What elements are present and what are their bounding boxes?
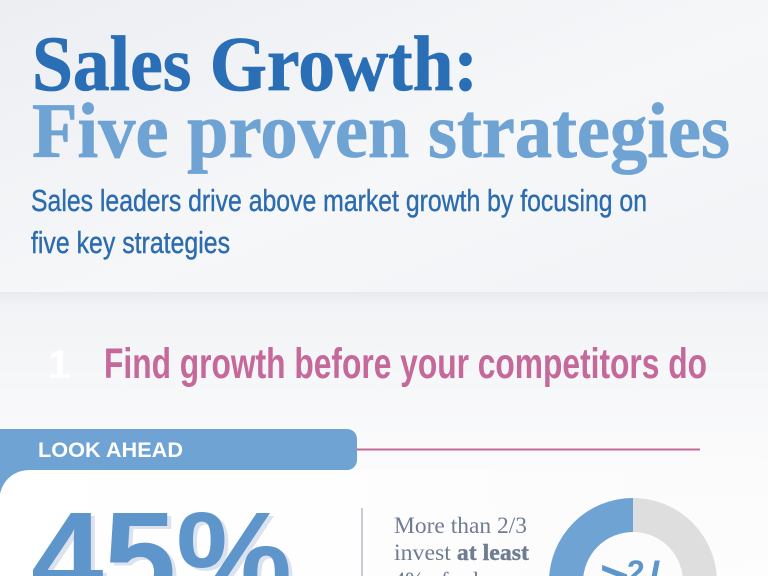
page background: [0, 292, 768, 576]
divider: [361, 508, 363, 576]
description text: More than 2/3: [394, 513, 527, 538]
description text: [394, 513, 529, 576]
title line 2: Five proven strategies: [32, 87, 730, 174]
tab label: LOOK AHEAD: [38, 439, 183, 462]
title line 1: Sales Growth:: [32, 20, 478, 107]
heading rule: [350, 448, 700, 450]
white panel: [0, 470, 768, 576]
header band: [0, 0, 768, 306]
panel tab: [0, 429, 357, 494]
description text: invest at least: [394, 540, 529, 565]
subtitle: five key strategies: [31, 225, 230, 260]
donut chart: [549, 498, 700, 576]
strategy number: 1: [48, 343, 70, 387]
donut label: [600, 550, 678, 576]
subtitle: [31, 183, 647, 260]
title: [32, 20, 730, 174]
panel: look ahead: [0, 429, 357, 494]
